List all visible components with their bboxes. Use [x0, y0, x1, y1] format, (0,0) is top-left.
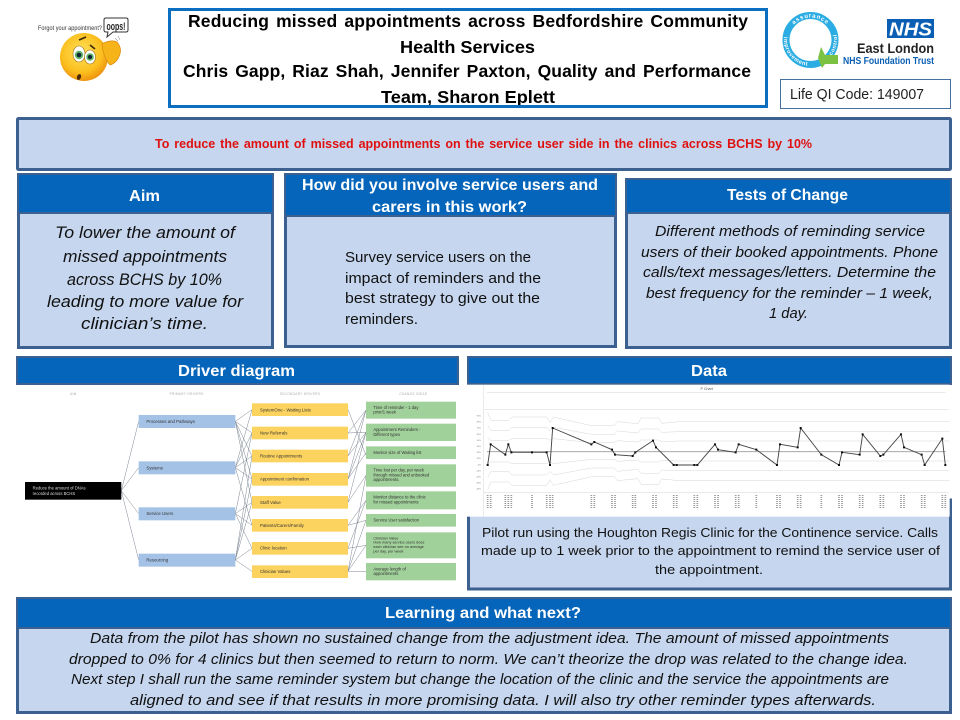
chart: driver diagram: Time lost per day, per week	[373, 468, 425, 473]
chart: P chart: 90%	[477, 416, 481, 418]
icon: assurance improvement control logo: assurance	[792, 14, 828, 24]
chart: driver diagram: per day, per week	[373, 549, 404, 553]
chart: driver diagram: Clinician Value	[373, 536, 398, 540]
chart: driver diagram: Routine Appointments	[260, 454, 302, 459]
title	[168, 10, 768, 108]
chart: driver diagram: Service User satisfaction	[373, 518, 420, 523]
logo: NHS East London: NHS Foundation Trust	[843, 56, 935, 67]
panel: goal banner	[18, 118, 950, 170]
chart: driver diagram: Clinic location	[260, 546, 287, 551]
chart: driver diagram: Monitor size of Waiting list	[373, 450, 422, 455]
icon: assurance improvement control logo: improvement	[784, 37, 808, 66]
icon: assurance improvement control logo	[782, 12, 838, 68]
chart: driver diagram: appointments.	[373, 477, 399, 482]
chart: driver diagram: Average length of	[373, 566, 407, 571]
chart: driver diagram: through missed and unbooked	[373, 472, 430, 477]
chart: driver diagram: Resourcing	[146, 557, 169, 562]
panel: service user involvement: How did you involve service users and	[302, 177, 598, 194]
chart: driver diagram: Service Users	[146, 511, 173, 516]
title: Chris Gapp, Riaz Shah, Jennifer Paxton, Quality and Performance	[183, 61, 751, 81]
panel: data: Pilot run using the Houghton Regis Clinic for the Continence service. Calls	[482, 525, 939, 540]
panel: tests of change: users of their booked appointments. Phone	[641, 244, 938, 261]
panel: data	[468, 357, 951, 589]
title: Reducing missed appointments across Bedfordshire Community	[188, 11, 748, 31]
logo: NHS East London: East London	[857, 41, 934, 56]
chart: driver diagram: How many service users does	[373, 541, 424, 545]
chart: driver diagram: PRIMARY DRIVERS	[170, 392, 204, 396]
chart: P chart: 50%	[477, 440, 481, 442]
chart: driver diagram: Appointment Reminders -	[373, 427, 421, 432]
panel: tests of change: Different methods of reminding service	[655, 223, 925, 240]
panel: learning and what next: aligned to and see if that results in more promising data. I will also try other reminder types afterwards.	[130, 692, 876, 709]
panel: tests of change: best frequency for the reminder – 1 week,	[646, 285, 933, 302]
panel: service user involvement: carers in this work?	[372, 199, 527, 216]
chart: driver diagram: Patients/Carers/Family	[260, 523, 305, 528]
panel: driver diagram heading: Driver diagram	[178, 363, 295, 380]
chart: driver diagram: Systems	[146, 465, 163, 470]
title: Health Services	[400, 37, 535, 57]
chart: P chart: -40%	[476, 488, 481, 490]
chart: P chart: 20%	[477, 458, 481, 460]
panel: goal banner: To reduce the amount of missed appointments on the service user side in the clinics across BCHS by 10%	[155, 137, 812, 151]
chart: driver diagram: Time of reminder - 1 day	[373, 405, 419, 410]
chart: P chart: 70%	[477, 428, 481, 430]
chart: driver diagram: for missed appointments	[373, 500, 419, 505]
chart: driver diagram: prior/1 week	[373, 410, 397, 415]
chart: driver diagram: Staff Value	[260, 500, 281, 505]
chart: driver diagram: Reduce the amount of DNAs	[33, 486, 86, 491]
panel: service user involvement: reminders.	[345, 311, 418, 328]
chart: driver diagram: recorded across BCHS	[33, 491, 75, 496]
chart: driver diagram: Processes and Pathways	[146, 419, 195, 424]
chart: driver diagram	[25, 392, 456, 580]
panel: aim: clinician’s time.	[81, 314, 208, 333]
panel: data: Data	[691, 363, 727, 380]
chart: driver diagram: SECONDARY DRIVERS	[280, 392, 320, 396]
icon: forgot your appointment emoji: Forgot your appointment?	[38, 26, 103, 32]
chart: P chart: -20%	[476, 476, 481, 478]
panel: aim: leading to more value for	[47, 292, 244, 311]
chart: P chart: 80%	[477, 422, 481, 424]
chart: driver diagram: SystemOne - Waiting Lists	[260, 407, 311, 412]
logo: NHS East London	[843, 18, 935, 67]
panel: learning and what next: dropped to 0% for 4 clinics but then seemed to return to norm. We can’t theorize the drop was related to the change idea.	[69, 651, 908, 668]
panel: tests of change: Tests of Change	[727, 187, 848, 204]
chart: P chart: 0%	[478, 464, 481, 466]
panel: aim: To lower the amount of	[55, 223, 237, 242]
chart: driver diagram: Monitor distance to the clinic	[373, 495, 426, 500]
icon: assurance improvement control logo: control	[830, 34, 838, 55]
panel: learning and what next: Data from the pilot has shown no sustained change from the adjustment idea. The amount of missed appointments	[90, 630, 890, 647]
panel: service user involvement	[285, 174, 616, 346]
chart: P chart: P Chart	[700, 387, 713, 391]
chart: P chart: 60%	[477, 434, 481, 436]
logo: NHS East London: NHS	[889, 18, 933, 40]
panel: service user involvement: Survey service users on the	[345, 249, 531, 266]
chart: P chart	[467, 385, 950, 517]
panel: tests of change	[626, 179, 951, 348]
panel: tests of change: 1 day.	[769, 305, 808, 322]
chart: driver diagram: appointments	[373, 571, 398, 576]
icon: forgot your appointment emoji: oops!	[106, 21, 126, 33]
icon: forgot your appointment emoji	[38, 18, 128, 81]
panel: learning and what next: Next step I shall run the same reminder system but change the location of the clinic and the service the appointments are	[71, 671, 889, 688]
panel: tests of change: calls/text messages/letters. Determine the	[643, 264, 936, 281]
chart: P chart: -10%	[476, 470, 481, 472]
chart: driver diagram: Appointment confirmation	[260, 477, 310, 482]
chart: driver diagram: each clinician see on average	[373, 545, 424, 549]
life QI code	[780, 80, 950, 108]
panel: aim: missed appointments	[63, 247, 228, 266]
panel: learning and what next: Learning and what next?	[385, 605, 581, 622]
panel: service user involvement: best strategy to give out the	[345, 290, 540, 307]
life QI code: Life QI Code: 149007	[790, 87, 924, 103]
panel: data: the appointment.	[655, 562, 763, 577]
chart: driver diagram: New Referrals	[260, 431, 287, 436]
panel: aim: Aim	[129, 188, 160, 205]
chart: P chart: -30%	[476, 482, 481, 484]
chart: P chart: 30%	[477, 452, 481, 454]
chart: driver diagram: Clinician Values	[260, 569, 290, 574]
title: Team, Sharon Eplett	[381, 87, 555, 107]
panel: driver diagram heading	[17, 357, 458, 384]
chart: driver diagram: AIM	[70, 392, 77, 396]
panel: aim: across BCHS by 10%	[67, 270, 222, 289]
panel: aim	[18, 174, 273, 348]
panel: data: made up to 1 week prior to the appointment to remind the service user of	[481, 543, 940, 558]
chart: driver diagram: CHANGE IDEAS	[399, 392, 427, 396]
chart: driver diagram: Different types	[373, 432, 400, 437]
chart: P chart: 40%	[477, 446, 481, 448]
panel: service user involvement: impact of reminders and the	[345, 270, 541, 287]
panel: learning and what next	[17, 598, 951, 712]
